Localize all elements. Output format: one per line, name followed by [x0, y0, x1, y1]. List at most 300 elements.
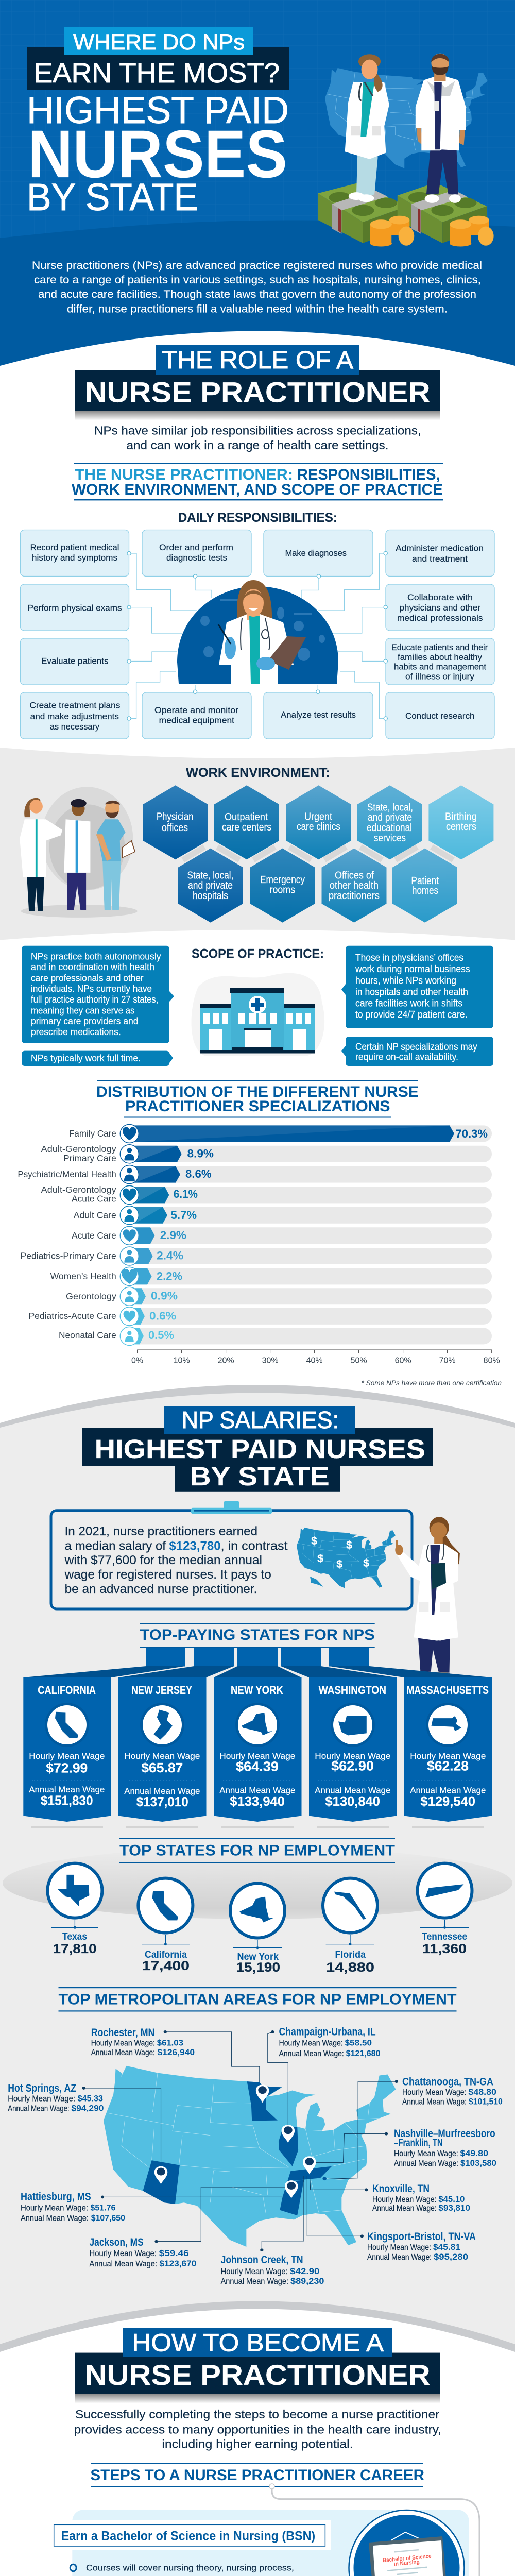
- employment: tennessee: 11,360: [422, 1942, 467, 1956]
- location pins: [154, 2084, 327, 2198]
- leader lines: [84, 2032, 397, 2250]
- category labels: Acute Care: [72, 1194, 116, 1204]
- metro: jackson: [90, 2236, 196, 2268]
- heading: scope of practice: SCOPE OF PRACTICE:: [192, 947, 324, 961]
- metro: champaign-urbana: $58.50: [345, 2038, 372, 2047]
- bar tracks: [130, 1125, 492, 1344]
- responsibility box text: Make diagnoses: [285, 549, 347, 558]
- title: where do NPs earn the most: WHERE DO NPs: [73, 30, 245, 55]
- heading: top states employment: TOP STATES FOR NP EMPLOYMENT: [119, 1842, 395, 1859]
- callout: hours: care facilities work in shifts: [355, 998, 462, 1009]
- bars: [130, 1125, 454, 1344]
- metro: hattiesburg: $51.76: [90, 2203, 115, 2212]
- card: california: Hourly Mean Wage: [29, 1751, 105, 1761]
- how to become intro text: provides access to many opportunities in the health care industry,: [74, 2422, 441, 2436]
- metro: knoxville: $45.10: [438, 2194, 465, 2204]
- responsibility box text: Administer medication: [396, 544, 484, 553]
- responsibility box text: habits and management: [394, 663, 486, 672]
- employment: california: California: [145, 1950, 187, 1960]
- callout: hours: in hospitals and other health: [355, 987, 468, 997]
- metro: champaign-urbana: Champaign-Urbana, IL: [279, 2026, 376, 2038]
- title: where do NPs earn the most: [27, 27, 289, 90]
- callout: full time: [22, 1051, 173, 1066]
- metro: hattiesburg: Annual Mean Wage:: [21, 2214, 89, 2223]
- hexagon labels: rooms: [270, 885, 295, 896]
- callout: autonomy: [22, 946, 174, 1043]
- panel: salaries background: [0, 1385, 515, 2370]
- card: massachusetts: Annual Mean Wage: [410, 1786, 486, 1795]
- callout: autonomy: full practice authority in 27 states,: [31, 994, 158, 1005]
- callout: autonomy: prescribe medications.: [31, 1026, 121, 1037]
- heading: steps: STEPS TO A NURSE PRACTITIONER CAREER: [90, 2467, 424, 2484]
- metro: chattanooga: Chattanooga, TN-GA: [402, 2076, 493, 2088]
- steps connector arrow path: [68, 2484, 479, 2576]
- bar chart: specializations: [18, 1124, 502, 1387]
- responsibility box text: Create treatment plans: [29, 701, 120, 710]
- axis: 60%: [395, 1357, 411, 1365]
- card: massachusetts: [404, 1677, 492, 1828]
- metro: champaign-urbana: Hourly Mean Wage:: [279, 2039, 343, 2047]
- category icons: [120, 1124, 139, 1345]
- responsibility box text: Conduct research: [405, 711, 475, 721]
- heading: top-paying states: TOP-PAYING STATES FOR NPS: [140, 1626, 375, 1643]
- metro: kingsport-bristol: $95,280: [434, 2252, 468, 2262]
- money stack right: [398, 182, 487, 243]
- intro paragraph: care to a range of patients in various settings, such as hospitals, nursing homes, clinics,: [34, 274, 481, 286]
- metro: johnson creek: Johnson Creek, TN: [221, 2254, 303, 2266]
- card: new jersey: Annual Mean Wage: [124, 1786, 200, 1796]
- axis: [131, 1350, 500, 1365]
- hexagon labels: homes: [412, 885, 438, 896]
- metro: jackson: $123,670: [159, 2259, 196, 2268]
- responsibility box text: Perform physical exams: [28, 604, 122, 613]
- callout: autonomy: NPs practice both autonomously: [31, 951, 161, 962]
- subheading: responsibilities: THE NURSE PRACTITIONER:: [75, 466, 293, 483]
- axis: 80%: [484, 1357, 500, 1365]
- intro paragraph: [32, 260, 482, 315]
- subheading: responsibilities: WORK ENVIRONMENT, AND SCOPE OF PRACTICE: [72, 481, 443, 498]
- money stack left: [318, 183, 407, 243]
- median salary text: a median salary of: [65, 1539, 166, 1553]
- metro: knoxville: $93,810: [438, 2203, 470, 2213]
- median salary text: wage for registered nurses. It pays to: [64, 1568, 271, 1582]
- metro: hattiesburg: Hattiesburg, MS: [21, 2191, 91, 2203]
- axis: 10%: [174, 1357, 190, 1365]
- metro: kingsport-bristol: [367, 2231, 476, 2262]
- responsibility box text: as necessary: [50, 722, 100, 732]
- metro: chattanooga: Annual Mean Wage:: [402, 2098, 467, 2106]
- heading: how to become: NURSE PRACTITIONER: [84, 2359, 431, 2391]
- callout: full time: NPs typically work full time.: [31, 1053, 141, 1063]
- hexagon labels: [157, 802, 477, 902]
- bar values: 8.9%: [187, 1147, 214, 1160]
- card: new york: [214, 1677, 302, 1828]
- bar values: 6.1%: [174, 1188, 198, 1200]
- employment: texas: 17,810: [53, 1942, 97, 1956]
- responsibility box text: history and symptoms: [32, 553, 117, 563]
- category labels: Psychiatric/Mental Health: [18, 1169, 116, 1179]
- card: new jersey: Hourly Mean Wage: [124, 1751, 200, 1761]
- card: california: [23, 1677, 111, 1828]
- hexagon labels: State, local,: [187, 870, 233, 881]
- hexagon labels: and private: [188, 880, 233, 891]
- callout: hours: Those in physicians’ offices: [355, 953, 464, 963]
- heading: distribution: [96, 1080, 419, 1118]
- callout: on-call: [341, 1037, 493, 1066]
- intro paragraph: and acute care facilities. Though state laws that govern the autonomy of the profession: [38, 289, 476, 300]
- heading: how to become: [75, 2328, 440, 2403]
- median salary text: , in contrast: [221, 1539, 288, 1553]
- heading: NP salaries: [82, 1406, 433, 1492]
- female nurse: [345, 54, 389, 202]
- icon: clip: [191, 1501, 272, 1514]
- metro: champaign-urbana: Annual Mean Wage:: [279, 2049, 344, 2058]
- median salary text: [64, 1524, 288, 1596]
- category labels: Adult Care: [74, 1210, 116, 1221]
- title: highest paid nurses by state: [27, 90, 289, 218]
- card: washington: Hourly Mean Wage: [315, 1751, 390, 1761]
- category labels: Women’s Health: [50, 1271, 116, 1281]
- bar values: 5.7%: [171, 1209, 197, 1222]
- icon: diploma: [349, 2510, 465, 2576]
- us map with dollar signs: $: [346, 1539, 352, 1551]
- metro: rochester: Hourly Mean Wage:: [91, 2039, 155, 2047]
- responsibility box text: diagnostic tests: [166, 553, 227, 563]
- card: new jersey: $137,010: [136, 1794, 188, 1809]
- heading: distribution: DISTRIBUTION OF THE DIFFERENT NURSE: [96, 1083, 419, 1100]
- heading: top metropolitan areas: TOP METROPOLITAN AREAS FOR NP EMPLOYMENT: [59, 1991, 456, 2008]
- metro: kingsport-bristol: Hourly Mean Wage:: [367, 2243, 431, 2252]
- title: highest paid nurses by state: HIGHEST PAID: [27, 90, 289, 131]
- us map with dollar signs: $: [363, 1557, 369, 1569]
- metro: kingsport-bristol: $45.81: [433, 2242, 460, 2252]
- step 1: BSN: Courses will cover nursing theory, nursing process,: [86, 2563, 294, 2573]
- responsibility box text: medical equipment: [159, 716, 234, 725]
- card: california: $72.99: [46, 1760, 88, 1776]
- bar values: 70.3%: [455, 1127, 488, 1140]
- metro: nashville: Nashville–Murfreesboro: [394, 2128, 495, 2140]
- median salary text: In 2021, nurse practitioners earned: [65, 1524, 258, 1538]
- callout: on-call: Certain NP specializations may: [355, 1042, 477, 1053]
- category labels: [18, 1128, 116, 1341]
- metro: rochester: $61.03: [157, 2038, 183, 2047]
- callout: autonomy: primary care providers and: [31, 1015, 138, 1026]
- metro: johnson creek: Hourly Mean Wage:: [221, 2267, 288, 2276]
- responsibility box text: Operate and monitor: [154, 706, 239, 715]
- employment: new york: 15,190: [236, 1960, 280, 1975]
- title: highest paid nurses by state: BY STATE: [27, 176, 198, 218]
- hexagon labels: care centers: [222, 822, 271, 833]
- role intro text: NPs have similar job responsibilities across specializations,: [94, 424, 421, 437]
- illustration: nurses on money stacks: [318, 54, 494, 246]
- callout: hours: [341, 946, 493, 1028]
- metro: champaign-urbana: [279, 2026, 380, 2058]
- hexagon labels: Offices of: [335, 870, 374, 881]
- hexagon labels: Physician: [157, 811, 194, 822]
- hexagon labels: State, local,: [367, 802, 413, 814]
- title: highest paid nurses by state: NURSES: [28, 116, 287, 192]
- bar values: 2.4%: [157, 1249, 183, 1262]
- hexagon labels: practitioners: [329, 890, 380, 902]
- hexagon labels: and private: [368, 812, 412, 823]
- employment: florida: 14,880: [326, 1960, 374, 1975]
- hexagon labels: Birthing: [445, 811, 477, 822]
- metro: johnson creek: $89,230: [290, 2276, 324, 2286]
- bar values: 8.6%: [185, 1167, 212, 1180]
- category labels: Gerontology: [66, 1291, 116, 1301]
- metro: hot springs: $94,290: [71, 2103, 104, 2113]
- metro: hattiesburg: [21, 2191, 125, 2223]
- median salary text: with $77,600 for the median annual: [64, 1553, 262, 1567]
- metro: rochester: [91, 2027, 195, 2057]
- metro map: [82, 2030, 398, 2251]
- heading: NP salaries: NP SALARIES:: [182, 1406, 339, 1433]
- heading: work environment: WORK ENVIRONMENT:: [186, 766, 330, 780]
- card: washington: Annual Mean Wage: [315, 1786, 390, 1795]
- metro: hattiesburg: Hourly Mean Wage:: [21, 2204, 88, 2212]
- role intro text: and can work in a range of health care settings.: [127, 438, 388, 452]
- axis: 50%: [351, 1357, 367, 1365]
- employment: tennessee: [417, 1863, 472, 1956]
- hexagon labels: Patient: [411, 875, 439, 887]
- employment: california: [138, 1878, 193, 1973]
- metro: jackson: Jackson, MS: [90, 2236, 144, 2248]
- panel: work environment: [0, 748, 515, 940]
- card: california: $151,830: [41, 1793, 93, 1808]
- leader dots: [82, 2030, 398, 2251]
- responsibility box text: Collaborate with: [407, 593, 473, 602]
- how to become intro text: Successfully completing the steps to become a nurse practitioner: [75, 2408, 440, 2421]
- metro: nashville: Annual Mean Wage:: [394, 2159, 458, 2168]
- card: new york: NEW YORK: [231, 1684, 283, 1697]
- heading: the role of a nurse practitioner: THE ROLE OF A: [162, 347, 353, 374]
- subheading: responsibilities: RESPONSIBILITIES,: [297, 466, 440, 483]
- card: washington: $62.90: [331, 1758, 374, 1774]
- bar values: [148, 1127, 488, 1342]
- employment: florida: Florida: [335, 1950, 366, 1960]
- employment: california: 17,400: [142, 1959, 190, 1973]
- employment: new york: [230, 1884, 285, 1975]
- hexagon labels: care clinics: [297, 821, 340, 833]
- bar values: 2.9%: [160, 1229, 186, 1242]
- callout: autonomy: meaning they can serve as: [31, 1005, 135, 1015]
- us map with dollar signs: $: [311, 1535, 317, 1547]
- intro paragraph: Nurse practitioners (NPs) are advanced practice registered nurses who provide medical: [32, 260, 482, 272]
- axis: 30%: [262, 1357, 279, 1365]
- card: massachusetts: $129,540: [420, 1793, 475, 1809]
- employment: new york: New York: [237, 1952, 279, 1962]
- metro: nashville: $49.80: [460, 2148, 488, 2158]
- card: massachusetts: $62.28: [427, 1758, 469, 1774]
- category labels: Pediatrics-Primary Care: [21, 1250, 116, 1261]
- metro: rochester: Rochester, MN: [91, 2027, 154, 2039]
- how to become intro text: [74, 2408, 441, 2450]
- metro: jackson: Hourly Mean Wage:: [90, 2249, 157, 2258]
- card: new jersey: [118, 1677, 206, 1828]
- card connectors: [23, 1648, 492, 1677]
- axis: 40%: [306, 1357, 323, 1365]
- heading: NP salaries: BY STATE: [190, 1462, 330, 1491]
- metro: johnson creek: [221, 2254, 324, 2286]
- card: massachusetts: Hourly Mean Wage: [410, 1751, 486, 1761]
- metro: johnson creek: $42.90: [290, 2266, 319, 2276]
- responsibility box text: Order and perform: [159, 543, 233, 552]
- card: new york: $64.39: [236, 1758, 279, 1774]
- us map with dollar signs: $: [336, 1558, 342, 1570]
- hexagon labels: Emergency: [260, 874, 305, 886]
- card: new york: Annual Mean Wage: [219, 1786, 295, 1795]
- us map with dollar signs: [297, 1528, 396, 1588]
- state cards: [23, 1648, 492, 1828]
- metro: jackson: Annual Mean Wage:: [90, 2260, 157, 2268]
- employment: texas: [47, 1863, 102, 1956]
- box node dots: [127, 551, 387, 720]
- metro: knoxville: Knoxville, TN: [372, 2183, 430, 2195]
- metro: nashville: Hourly Mean Wage:: [394, 2149, 458, 2158]
- us map backdrop: [325, 68, 488, 168]
- step 1: BSN: [54, 2510, 469, 2576]
- coins: [370, 216, 494, 246]
- metro: champaign-urbana: $121,680: [346, 2048, 380, 2058]
- bar values: 0.9%: [151, 1290, 178, 1302]
- male nurse: [416, 54, 466, 203]
- metro: chattanooga: [402, 2076, 503, 2106]
- employment: texas: Texas: [62, 1931, 87, 1942]
- metro: knoxville: Hourly Mean Wage:: [372, 2195, 437, 2204]
- hexagons: [143, 785, 493, 923]
- axis: 20%: [218, 1357, 234, 1365]
- bar values: 0.5%: [148, 1329, 174, 1342]
- heading: NP salaries: HIGHEST PAID NURSES: [95, 1434, 425, 1464]
- card: washington: WASHINGTON: [319, 1684, 386, 1697]
- heading: how to become: HOW TO BECOME A: [132, 2330, 384, 2357]
- hexagon labels: educational: [367, 822, 412, 834]
- highlighted states: [143, 2081, 332, 2215]
- metro: johnson creek: Annual Mean Wage:: [221, 2277, 288, 2286]
- responsibility box text: and make adjustments: [30, 712, 119, 721]
- callout: hours: to provide 24/7 patient care.: [355, 1010, 468, 1021]
- card: new york: Hourly Mean Wage: [219, 1751, 295, 1761]
- card: new york: $133,940: [230, 1793, 285, 1809]
- responsibility boxes: [21, 530, 494, 739]
- metro: knoxville: Annual Mean Wage:: [372, 2204, 437, 2213]
- callout: autonomy: care professionals and other: [31, 973, 144, 983]
- responsibility box text: of illness or injury: [405, 672, 475, 682]
- icon: hospital building: [191, 973, 324, 1056]
- card: california: Annual Mean Wage: [29, 1785, 105, 1794]
- card: new jersey: NEW JERSEY: [131, 1684, 192, 1697]
- title: where do NPs earn the most: EARN THE MOST?: [34, 58, 280, 89]
- metro: jackson: $59.46: [159, 2248, 189, 2258]
- hexagon labels: hospitals: [193, 890, 228, 902]
- step 1: BSN: Earn a Bachelor of Science in Nursing (BSN): [61, 2529, 315, 2544]
- metro: rochester: $126,940: [158, 2047, 195, 2057]
- responsibility box text: [28, 543, 488, 732]
- axis: 0%: [131, 1357, 143, 1365]
- center illustration: nurse practitioner: [177, 580, 338, 684]
- bar values: 0.6%: [149, 1310, 176, 1322]
- category labels: Neonatal Care: [59, 1330, 116, 1341]
- callout: autonomy: and in coordination with health: [31, 961, 154, 972]
- illustration: three clinicians: [20, 787, 138, 918]
- metro: rochester: Annual Mean Wage:: [91, 2048, 155, 2057]
- axis: 70%: [439, 1357, 456, 1365]
- category labels: Pediatrics-Acute Care: [29, 1311, 116, 1321]
- metro: hot springs: [8, 2082, 104, 2113]
- connector lines: [129, 553, 386, 718]
- card: new jersey: $65.87: [141, 1760, 183, 1775]
- metro: hot springs: Annual Mean Wage:: [8, 2104, 70, 2113]
- hexagon labels: services: [374, 833, 406, 844]
- heading: daily responsibilities: DAILY RESPONSIBILITIES:: [178, 511, 337, 525]
- responsibility box text: medical professionals: [397, 614, 483, 623]
- callout: on-call: require on-call availability.: [355, 1052, 458, 1062]
- callout: autonomy: individuals. NPs currently have: [31, 983, 152, 994]
- section background: how to become: [0, 2301, 515, 2375]
- hexagon labels: centers: [446, 821, 476, 833]
- metro: chattanooga: $48.80: [468, 2087, 496, 2097]
- grey ellipse behind employment: [3, 1847, 512, 1919]
- metro: hot springs: Hot Springs, AZ: [8, 2082, 76, 2094]
- card: california: CALIFORNIA: [38, 1684, 96, 1697]
- metro: chattanooga: $101,510: [469, 2097, 503, 2106]
- card: washington: $130,840: [325, 1793, 380, 1809]
- employment: florida: [323, 1878, 377, 1975]
- intro paragraph: differ, nurse practitioners fill a valuable need within the health care system.: [67, 303, 448, 315]
- bar values: 2.2%: [157, 1269, 182, 1282]
- illustration: nurse pointing: [395, 1517, 460, 1678]
- metro: hot springs: $45.33: [77, 2094, 103, 2104]
- category labels: Acute Care: [72, 1230, 116, 1241]
- footnote: * Some NPs have more than one certification: [362, 1379, 502, 1387]
- how to become intro text: including higher earning potential.: [162, 2437, 353, 2450]
- responsibility box text: families about healthy: [398, 653, 483, 662]
- responsibility box text: Educate patients and their: [391, 643, 488, 652]
- card: massachusetts: MASSACHUSETTS: [407, 1684, 489, 1697]
- heading: the role of a nurse practitioner: NURSE PRACTITIONER: [84, 376, 431, 408]
- responsibility box text: Record patient medical: [30, 543, 119, 552]
- metro: chattanooga: Hourly Mean Wage:: [402, 2088, 467, 2097]
- hexagon labels: other health: [330, 880, 379, 891]
- responsibility box text: physicians and other: [400, 603, 481, 613]
- median salary text: $123,780: [169, 1539, 221, 1553]
- card: washington: [309, 1677, 397, 1828]
- responsibility box text: and treatment: [412, 554, 468, 564]
- icon: diploma: in Nursing: [393, 2559, 420, 2567]
- hero panel: [0, 0, 515, 371]
- category labels: Adult-Gerontology: [41, 1184, 116, 1195]
- category labels: Family Care: [69, 1128, 116, 1139]
- metro: hot springs: Hourly Mean Wage:: [8, 2095, 75, 2104]
- icon: diploma: Bachelor of Science: [382, 2553, 432, 2564]
- responsibility box text: Evaluate patients: [41, 656, 108, 666]
- metro: knoxville: [372, 2183, 470, 2213]
- hexagon labels: Urgent: [304, 811, 332, 822]
- responsibility box text: Analyze test results: [281, 710, 356, 720]
- clipboard callout: [51, 1501, 412, 1609]
- heading: distribution: PRACTITIONER SPECIALIZATIONS: [125, 1098, 390, 1115]
- category labels: Adult-Gerontology: [41, 1144, 116, 1154]
- callout: hours: work during normal business: [355, 964, 470, 975]
- median salary text: be an advanced nurse practitioner.: [65, 1582, 257, 1596]
- metro: nashville: –Franklin, TN: [394, 2137, 443, 2149]
- metro: nashville: $103,580: [460, 2158, 496, 2168]
- metro: kingsport-bristol: Kingsport-Bristol, TN-VA: [367, 2231, 476, 2243]
- connector bars: [183, 847, 453, 860]
- metro: hattiesburg: $107,650: [91, 2213, 125, 2223]
- category labels: Primary Care: [63, 1153, 116, 1163]
- hexagon labels: offices: [162, 822, 188, 834]
